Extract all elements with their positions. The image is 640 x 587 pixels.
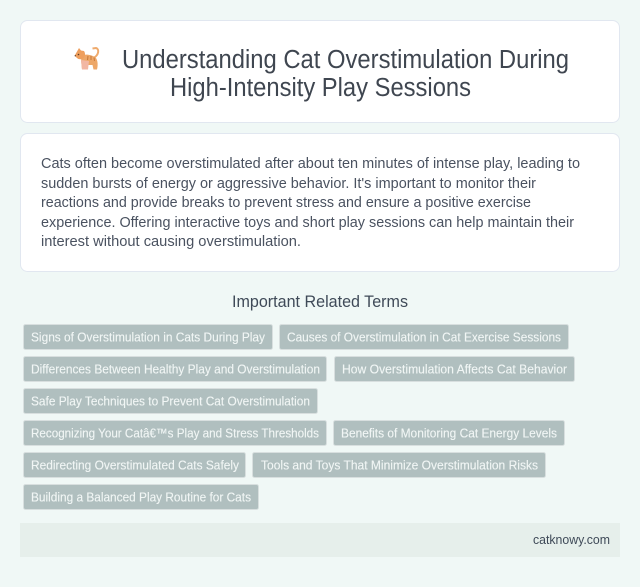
footer: catknowy.com [533, 532, 610, 547]
title text: Understanding Cat Overstimulation During [122, 46, 569, 74]
tag [24, 452, 246, 478]
tag [24, 484, 258, 510]
tag: Signs of Overstimulation in Cats During Play [31, 330, 266, 344]
title text: High-Intensity Play Sessions [170, 74, 471, 102]
panel: summary paragraph: Cats often become overstimulated after about ten minutes of intense play, leading to [41, 155, 580, 172]
icon: cat [75, 48, 98, 70]
tag [334, 356, 574, 382]
tag [280, 324, 568, 350]
tag: Differences Between Healthy Play and Overstimulation [31, 362, 320, 376]
panel: summary paragraph: sudden bursts of energy or aggressive behavior. It's important to monitor their [41, 175, 536, 192]
tag [334, 420, 564, 446]
tag [24, 324, 272, 350]
panel: summary paragraph: experience. Offering interactive toys and short play sessions can help maintain their [41, 214, 574, 231]
tag: Building a Balanced Play Routine for Cats [31, 490, 251, 504]
tag [24, 356, 326, 382]
footer [20, 523, 620, 557]
tag [24, 420, 326, 446]
title text [122, 46, 569, 102]
heading: related terms: Important Related Terms [232, 293, 408, 311]
tag: Causes of Overstimulation in Cat Exercise Sessions [287, 330, 561, 344]
tag: Benefits of Monitoring Cat Energy Levels [341, 426, 557, 440]
panel: title header [20, 20, 620, 122]
tag [24, 388, 318, 414]
tag: Tools and Toys That Minimize Overstimulation Risks [261, 458, 538, 472]
tag: Redirecting Overstimulated Cats Safely [31, 458, 240, 472]
tag [252, 452, 546, 478]
panel: summary paragraph: interest without causing overstimulation. [41, 233, 301, 250]
panel: summary paragraph: reactions and provide breaks to prevent stress and ensure a positive exercise [41, 194, 531, 211]
tag list [24, 324, 574, 510]
tag: Recognizing Your Catâ€™s Play and Stress Thresholds [31, 426, 319, 440]
tag: How Overstimulation Affects Cat Behavior [342, 362, 567, 376]
panel: summary paragraph [20, 134, 620, 272]
tag: Safe Play Techniques to Prevent Cat Overstimulation [31, 394, 310, 408]
